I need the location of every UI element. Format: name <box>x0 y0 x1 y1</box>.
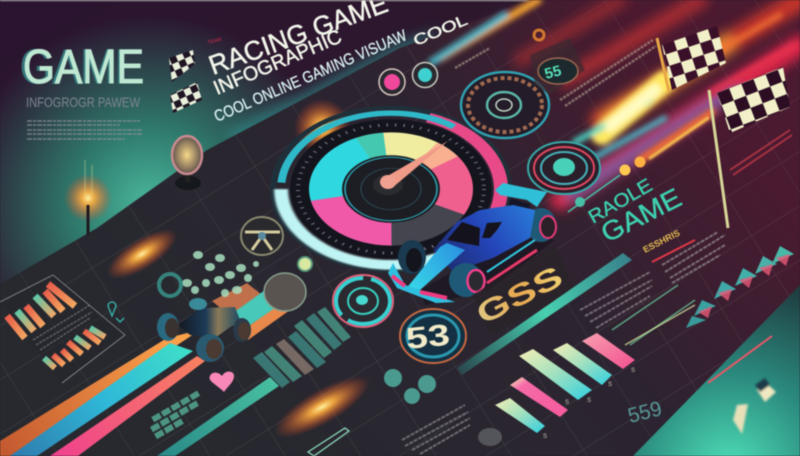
bar labels <box>543 368 635 440</box>
lower gauge line <box>625 305 695 345</box>
text block middle right <box>580 272 652 328</box>
stripe: cyan <box>10 343 193 456</box>
car left wheel <box>398 240 426 274</box>
text block upper right: ESSHRIS <box>641 228 682 255</box>
car pink accent <box>487 250 537 283</box>
small car wheels <box>157 313 251 362</box>
left text block <box>27 121 142 139</box>
gauge <box>241 85 541 293</box>
bar chart left upper <box>7 284 75 338</box>
capsule knob <box>264 273 306 311</box>
bar labels: S <box>543 434 547 440</box>
target dial <box>333 275 393 327</box>
equalizer chart <box>253 307 351 388</box>
small car body <box>178 307 240 338</box>
flag pole 2 <box>709 90 728 228</box>
bar 4 <box>553 343 612 385</box>
bar 5 <box>582 333 635 369</box>
blurred checkers <box>733 378 776 434</box>
flag pole 1 <box>657 38 669 92</box>
car front wing <box>388 263 455 303</box>
teal progress strip <box>612 285 695 345</box>
peaks chart <box>686 246 794 328</box>
flare above gauge <box>294 99 350 155</box>
icon: heart <box>210 371 234 392</box>
heading: race game: RAOLE <box>585 175 656 228</box>
car cockpit <box>447 222 502 246</box>
dial upper right <box>461 72 549 138</box>
flare dots <box>620 156 646 176</box>
car side sill <box>487 240 535 272</box>
speed badge 55 <box>530 38 585 95</box>
text block left panel <box>33 305 92 350</box>
bar chart left lower <box>44 328 105 368</box>
red text strip right <box>730 130 792 175</box>
dial lower right <box>528 142 600 194</box>
bar labels: S <box>587 398 591 404</box>
gauge needle <box>380 141 448 189</box>
icon: small checkered flag <box>169 50 202 113</box>
small red tag: TEAM <box>207 37 222 46</box>
red line <box>708 336 772 383</box>
small grid table <box>146 391 208 439</box>
icon: teal location pins <box>108 302 124 322</box>
bar 1 <box>495 398 545 433</box>
checkered flag 2 <box>717 67 790 133</box>
heading: Infographic: INFOGRAPHIC <box>210 26 345 100</box>
car shadow <box>420 235 555 305</box>
checkered flag 1 <box>662 26 726 90</box>
car rear wheel <box>526 208 556 242</box>
bar 3 <box>519 349 592 400</box>
left subheading: INFOGROGR PAWEW <box>26 94 141 110</box>
subheading: cool online gaming: COOL ONLINE GAMING VISUAW <box>212 27 410 126</box>
stripe: lower orange <box>246 303 290 340</box>
car rear wing <box>495 183 547 215</box>
bar 2 <box>510 377 568 417</box>
bar labels: S <box>631 368 635 374</box>
small orange dial icon <box>534 30 544 40</box>
connector with teal dot <box>568 175 620 212</box>
bar labels: S <box>608 382 612 388</box>
motion streaks <box>432 0 800 200</box>
speed badge 53: 53 <box>404 319 451 356</box>
stripe: orange <box>0 330 200 456</box>
car nose <box>405 243 465 290</box>
stripe: upper orange <box>212 283 262 316</box>
teal highlight under title <box>225 30 440 150</box>
GSS panel <box>471 245 575 335</box>
small mesh icon <box>478 428 502 446</box>
small teal dots <box>384 369 436 404</box>
teal lower right corner <box>633 285 800 456</box>
car body <box>433 205 535 272</box>
button: pink <box>379 69 405 95</box>
rounded outline box <box>308 428 349 456</box>
left heading: Game: GAME <box>23 41 144 94</box>
car front wheel <box>449 263 484 297</box>
dot matrix <box>182 251 259 297</box>
gauge colored segments <box>300 127 482 251</box>
button: teal <box>412 62 438 88</box>
bar labels: S <box>565 400 569 406</box>
text strip <box>455 40 656 106</box>
light post glow <box>64 160 112 235</box>
stripe: pink <box>50 356 205 456</box>
icon: small ring <box>159 274 181 296</box>
race car small <box>157 298 251 362</box>
cyan gradient banner <box>457 253 632 375</box>
orange flare lower <box>267 365 377 449</box>
title text <box>205 0 470 126</box>
teal strip <box>157 377 279 456</box>
flare left <box>100 220 184 288</box>
glow dot <box>298 257 312 271</box>
left heading: Game: GAME <box>20 41 143 94</box>
subheading: cool: COOL <box>411 12 470 50</box>
speed badge 55: 55 <box>543 62 563 83</box>
text block bottom <box>402 405 470 454</box>
heading: race game: GAME <box>596 183 686 248</box>
gauge outer rings <box>241 85 541 293</box>
speed badge 53 <box>400 309 466 363</box>
number 559: 559 <box>626 397 664 428</box>
left chart panel outline <box>0 275 125 383</box>
icon: lens on stand <box>172 136 202 190</box>
small car dome <box>189 298 207 310</box>
colored racing stripes <box>0 283 290 456</box>
GSS panel: GSS <box>471 260 568 331</box>
small buttons <box>379 62 438 95</box>
race car large <box>388 183 556 305</box>
icon: steering wheel <box>241 217 283 255</box>
text block upper right <box>641 228 725 283</box>
bar chart bottom <box>495 333 635 433</box>
stripe: upper cyan <box>226 285 290 332</box>
gauge hub <box>342 155 440 223</box>
